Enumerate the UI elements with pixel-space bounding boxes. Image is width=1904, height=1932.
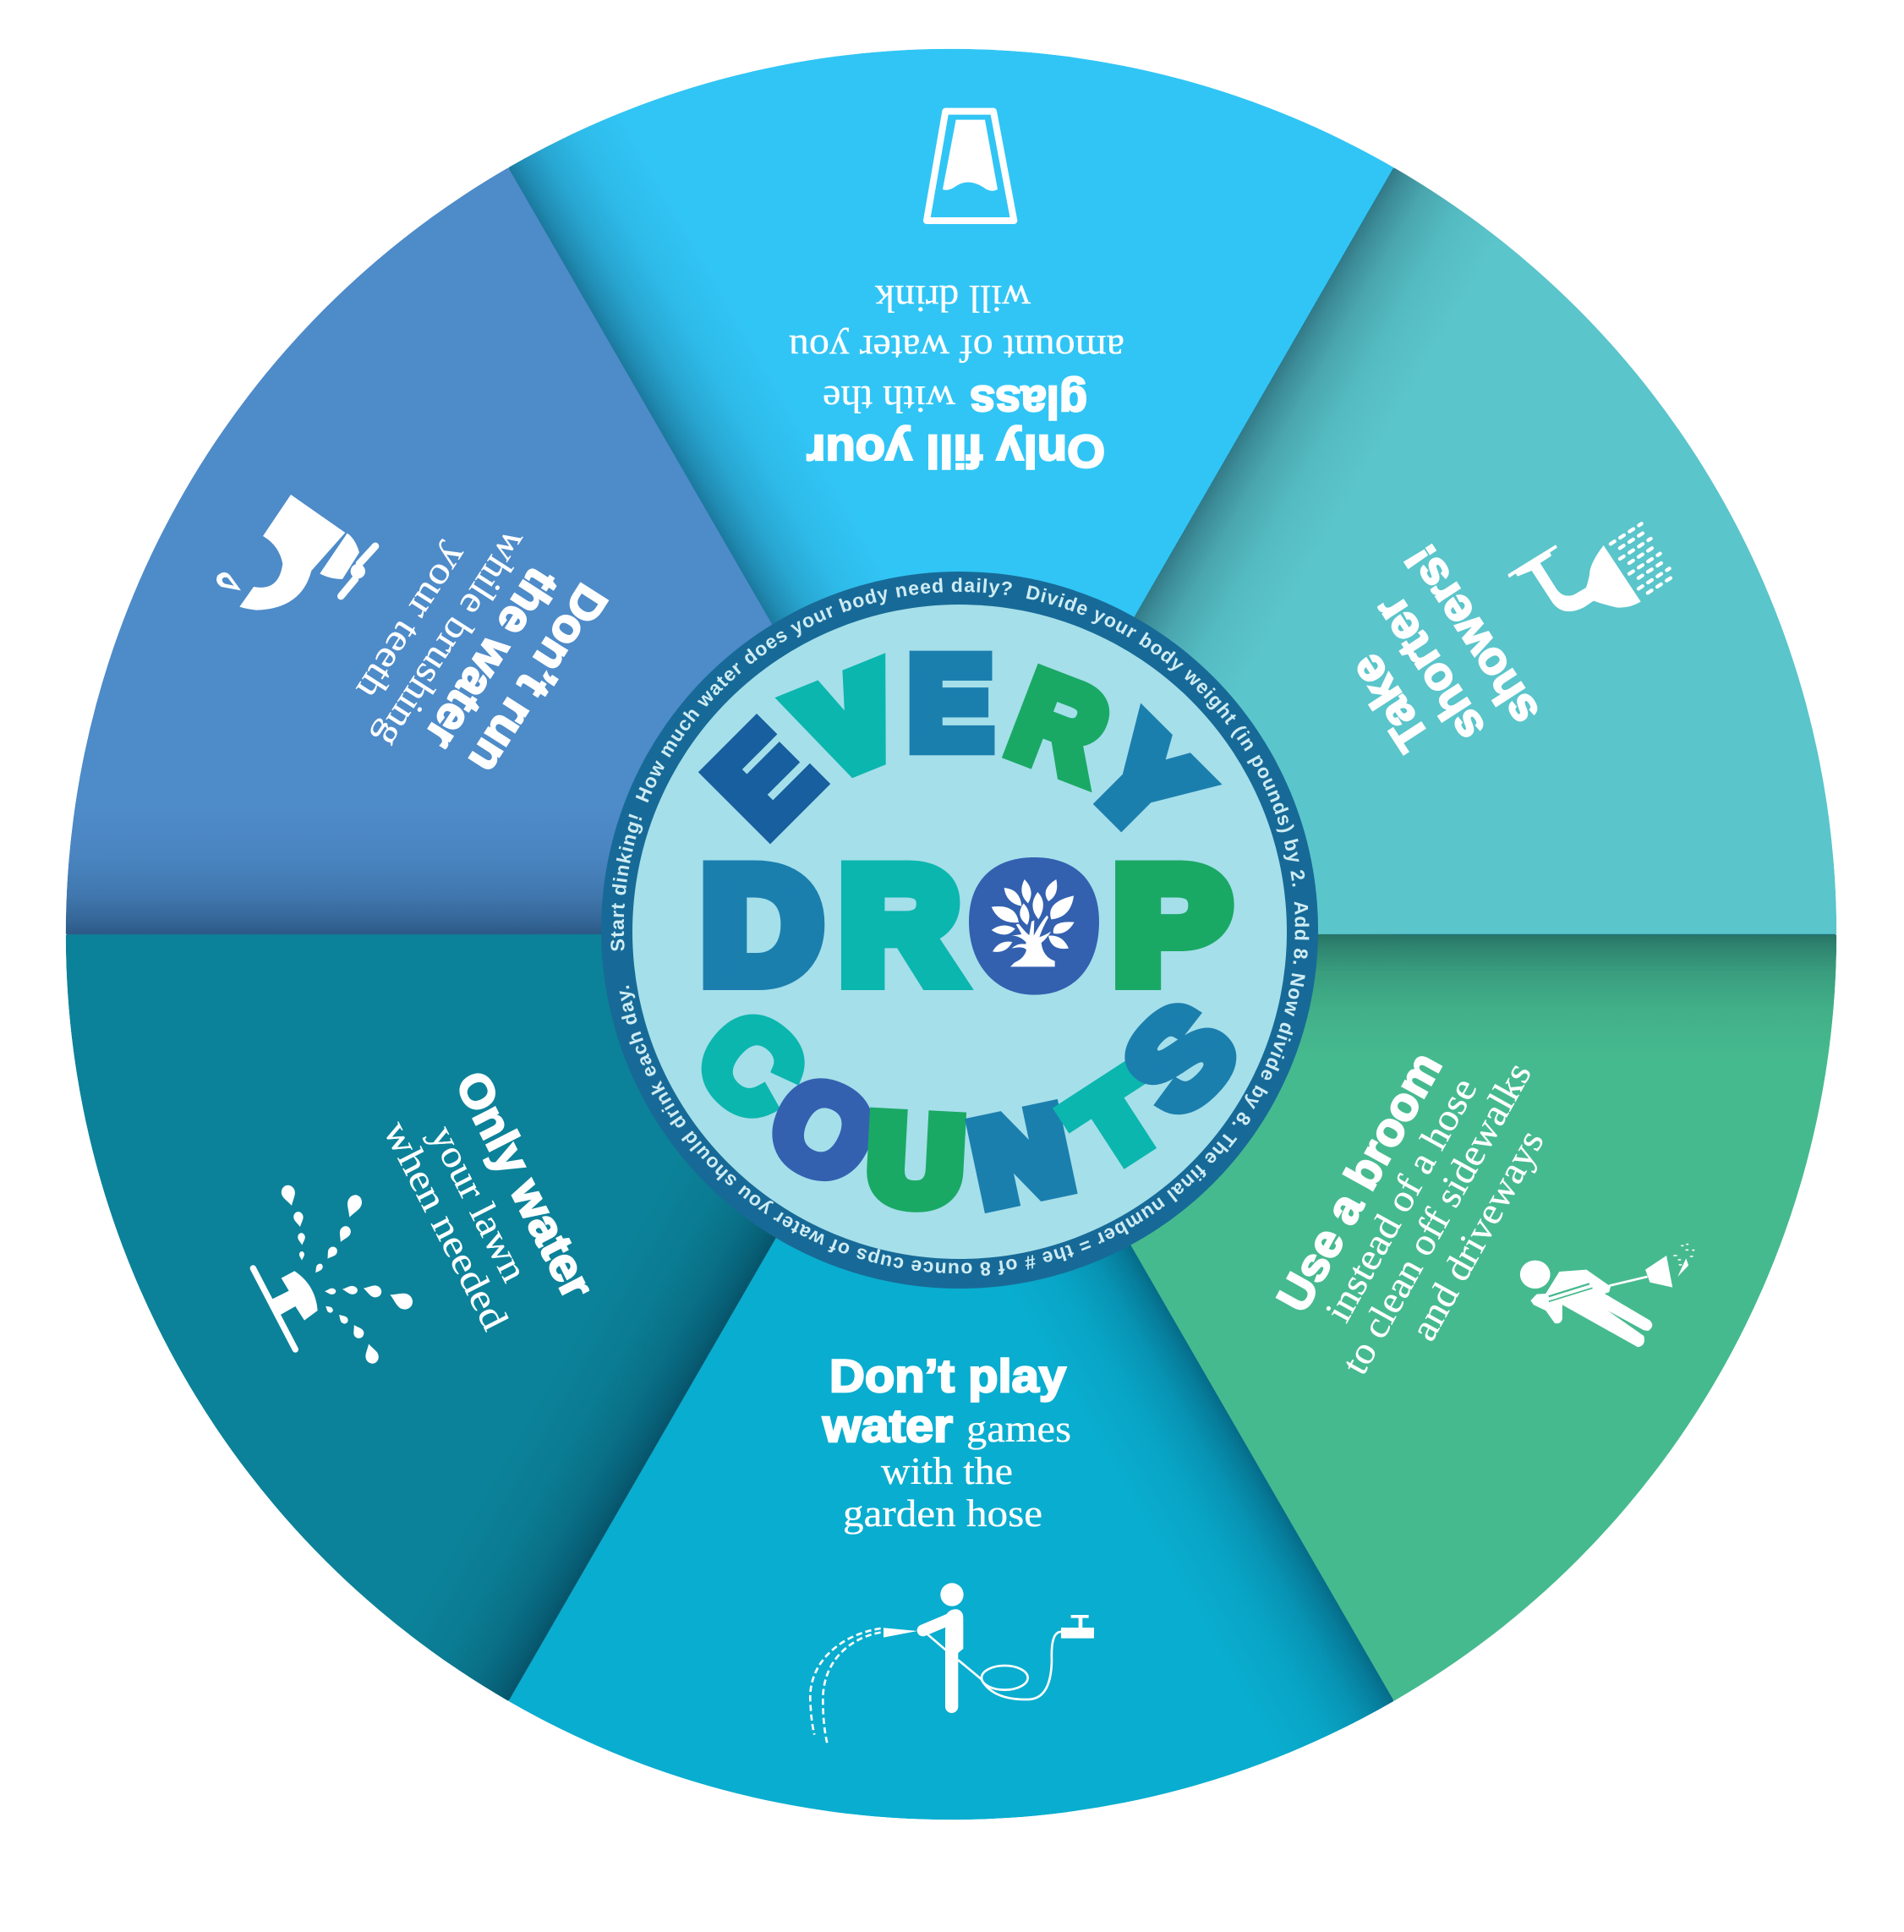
title: DROP (702, 835, 1229, 1015)
icon: sprinkler (253, 1184, 415, 1365)
text: water lawn: your lawn (422, 1119, 536, 1289)
text: shorter showers (1339, 535, 1549, 760)
text: water games (822, 1349, 1071, 1535)
title: COUNTS: C (673, 983, 829, 1146)
text: water games: water (822, 1399, 953, 1452)
text: brushing teeth: Don’t run (459, 575, 618, 783)
text: shorter showers: showers! (1393, 535, 1549, 735)
text: water lawn: when needed (375, 1114, 517, 1337)
text: fill your glass: with the (823, 378, 955, 420)
title: DROP: D (702, 835, 822, 1015)
text: fill your glass: Only fill your (807, 425, 1105, 478)
wedge: top (509, 49, 1393, 624)
panel: brushing teeth (66, 167, 773, 934)
title: EVERY: E (909, 631, 992, 775)
title: EVERY: V (786, 647, 913, 800)
medallion: every drop counts (601, 572, 1318, 1289)
text: use a broom: to clean off sidewalks (1333, 1055, 1540, 1381)
text: brushing teeth: your teeth (348, 538, 478, 707)
ring (601, 572, 1318, 1289)
title: COUNTS: U (866, 1091, 966, 1230)
wedge: upper left (66, 167, 773, 934)
text: use a broom: instead of a hose (1316, 1070, 1485, 1328)
wedge: upper right (1135, 167, 1836, 934)
panel: water lawn (66, 934, 776, 1701)
panel: water games (509, 1238, 1393, 1820)
text: water games: with the (881, 1450, 1013, 1492)
text: use a broom: and driveways (1402, 1123, 1552, 1348)
panel: shorter showers (1135, 167, 1836, 934)
title: COUNTS (673, 976, 1261, 1230)
text: shorter showers: shorter (1363, 588, 1495, 751)
wedge: lower right (1131, 934, 1836, 1701)
title: DROP: R (840, 835, 959, 1015)
text: use a broom: Use a broom (1267, 1043, 1452, 1321)
inner disc (632, 605, 1287, 1259)
icon: glass (927, 112, 1014, 221)
text: water lawn (375, 1063, 605, 1337)
text: brushing teeth (348, 523, 618, 783)
title: COUNTS: S (1097, 976, 1261, 1140)
icon: shower head (1507, 523, 1674, 611)
text: fill your glass (789, 277, 1124, 478)
title: EVERY: Y (1070, 707, 1218, 856)
title: COUNTS: O (752, 1048, 895, 1212)
title: EVERY: E (685, 701, 842, 858)
icon: person with hose (810, 1583, 1094, 1743)
text: water lawn: Only water (446, 1063, 605, 1307)
title: DROP: P (1114, 835, 1229, 1015)
text: water games: garden hose (843, 1492, 1042, 1535)
text: brushing teeth: the water (415, 559, 569, 758)
ring text: Start dinking! How much water does your body need daily? Divide your body weight (in pounds) by 2. Add 8. Now divide by 8. The final number = the # of 8 ounce cups of water you should drink each day. (610, 577, 1309, 1276)
icon: faucet (216, 495, 375, 610)
text: fill your glass: amount of water you (789, 327, 1124, 369)
wedge: bottom (509, 1238, 1393, 1820)
text: use a broom (1267, 1043, 1552, 1381)
text: shorter showers: Take (1339, 645, 1439, 760)
title: EVERY (685, 631, 1218, 858)
logo letter O with tree (969, 857, 1099, 995)
text: water games: games (966, 1408, 1071, 1450)
title: EVERY: R (994, 645, 1125, 807)
panel: use a broom (1131, 934, 1836, 1701)
text: brushing teeth: while brushing (367, 523, 537, 755)
text: water games: Don’t play (829, 1349, 1066, 1402)
tree (992, 879, 1075, 966)
text: fill your glass: will drink (874, 277, 1031, 320)
text: fill your glass: glass (970, 376, 1087, 429)
wedge: lower left (66, 934, 776, 1701)
title: COUNTS: N (963, 1085, 1080, 1229)
title: COUNTS: T (1053, 1053, 1179, 1190)
panel: fill your glass (509, 49, 1393, 624)
icon: person sweeping (1520, 1245, 1694, 1347)
